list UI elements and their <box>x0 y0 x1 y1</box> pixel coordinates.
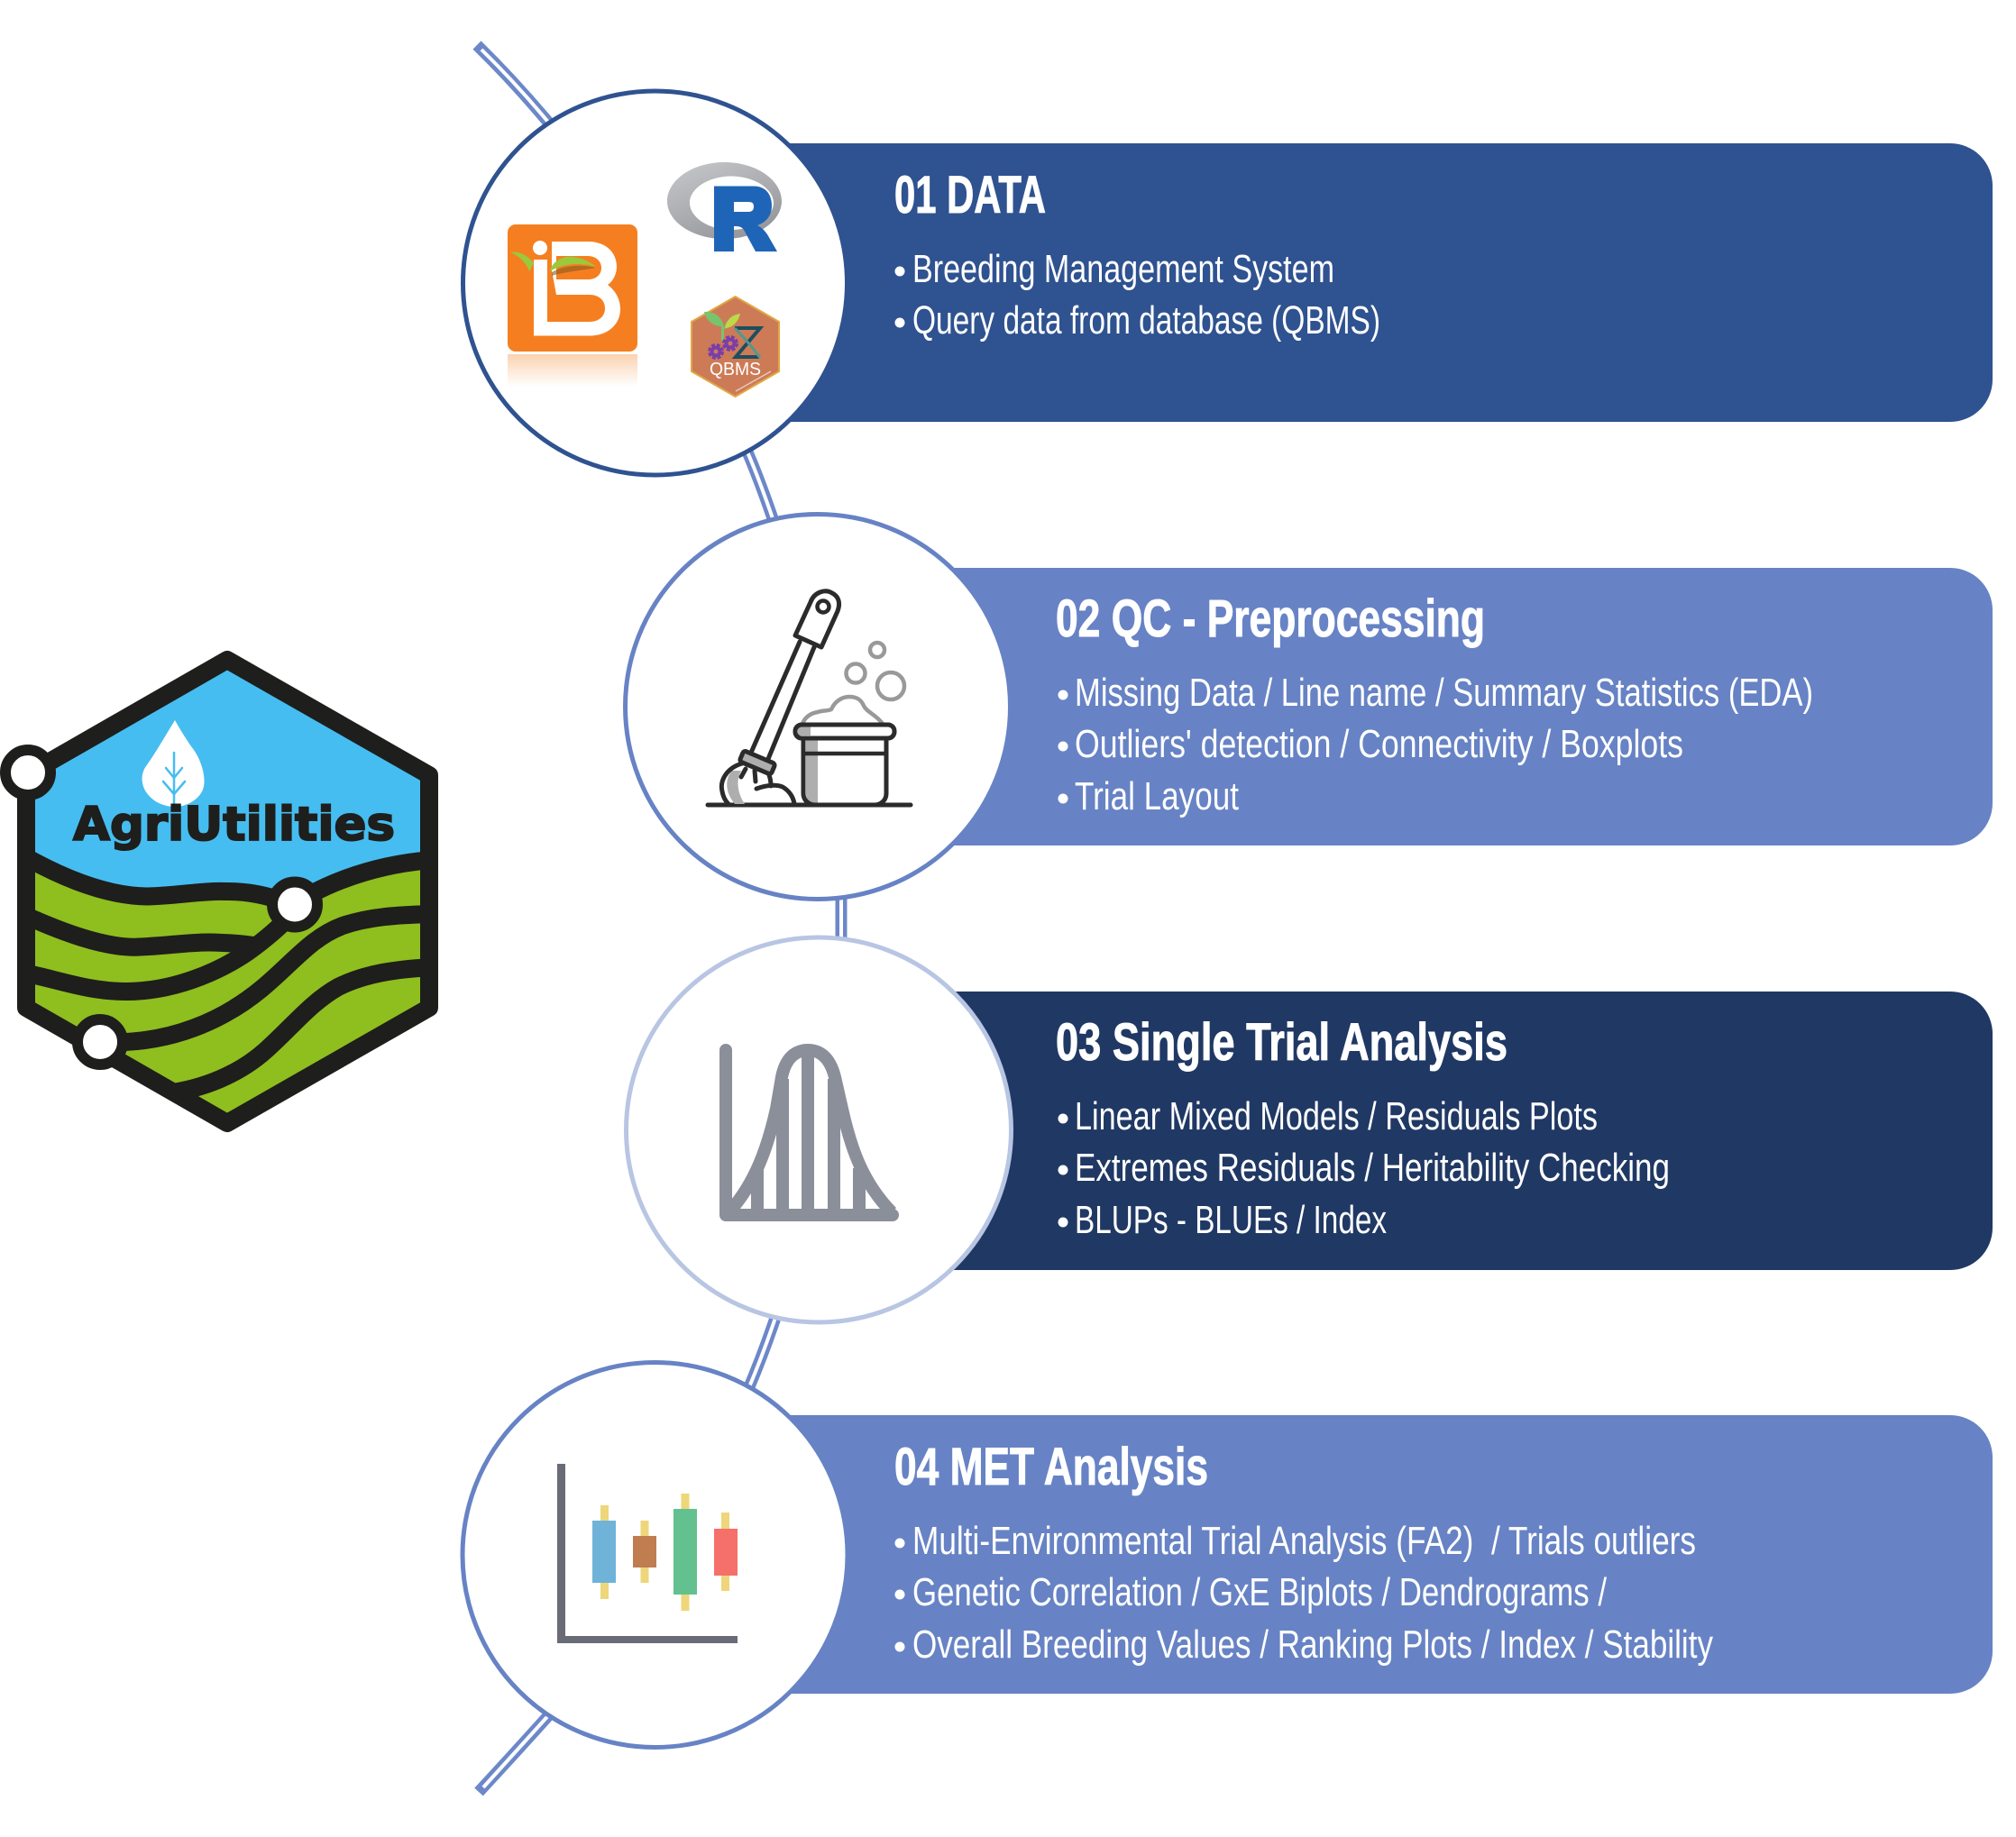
icon: R logo <box>667 162 782 251</box>
connector: timeline line through circles <box>477 45 841 1792</box>
text block: MET bullets: Genetic Correlation / GxE Biplots / Dendrograms / <box>912 1570 1608 1614</box>
text block: data bullets: Query data from database (QBMS) <box>912 298 1380 343</box>
heading: 02 QC - Preprocessing: 02 QC - Preprocessing <box>1056 589 1485 648</box>
text block: MET bullets: Overall Breeding Values / Ranking Plots / Index / Stability <box>912 1622 1713 1667</box>
nodes: white circles <box>5 750 317 1065</box>
text block: MET bullets <box>894 1519 1713 1667</box>
text block: QC bullets: Outliers' detection / Connectivity / Boxplots <box>1075 722 1683 766</box>
text block: data bullets: Breeding Management System <box>912 247 1334 291</box>
text block: QC bullets <box>1058 671 1813 818</box>
icon: BMS logo <box>508 224 637 387</box>
icon: QBMS hex sticker <box>692 297 779 397</box>
panel: 02 QC - Preprocessing <box>884 568 1993 845</box>
panel: 04 MET Analysis <box>721 1415 1993 1694</box>
text block: single trial bullets: Extremes Residuals / Heritability Checking <box>1075 1146 1670 1190</box>
text block: single trial bullets: Linear Mixed Models / Residuals Plots <box>1075 1094 1598 1138</box>
icon: boxplot chart <box>557 1464 738 1643</box>
text block: MET bullets: Multi-Environmental Trial Analysis (FA2) / Trials outliers <box>912 1519 1696 1563</box>
circle: mop and bucket <box>626 514 1010 900</box>
heading: 01 DATA: 01 DATA <box>894 166 1046 224</box>
panel: 01 DATA <box>721 143 1993 422</box>
icon: mop and bucket <box>708 591 911 805</box>
heading: 04 MET Analysis: 04 MET Analysis <box>894 1438 1208 1496</box>
circle: data logos <box>463 91 848 475</box>
icon: QBMS hex sticker: QBMS <box>710 360 761 379</box>
icon: leaf drop <box>142 720 205 807</box>
text block: data bullets <box>894 247 1380 343</box>
text block: single trial bullets: BLUPs - BLUEs / Index <box>1075 1198 1387 1242</box>
panel: 03 Single Trial Analysis <box>884 992 1993 1270</box>
logo text: AgriUtilities: AgriUtilities <box>73 798 395 852</box>
circle: normal distribution <box>626 937 1012 1322</box>
heading: 03 Single Trial Analysis: 03 Single Trial Analysis <box>1056 1013 1507 1072</box>
logo: AgriUtilities hexagon <box>5 660 433 1136</box>
circle: candlestick chart <box>463 1363 848 1747</box>
icon: bell curve <box>726 1050 893 1215</box>
text block: QC bullets: Missing Data / Line name / Summary Statistics (EDA) <box>1075 671 1813 715</box>
text block: single trial bullets <box>1058 1094 1670 1242</box>
text block: QC bullets: Trial Layout <box>1075 774 1239 818</box>
